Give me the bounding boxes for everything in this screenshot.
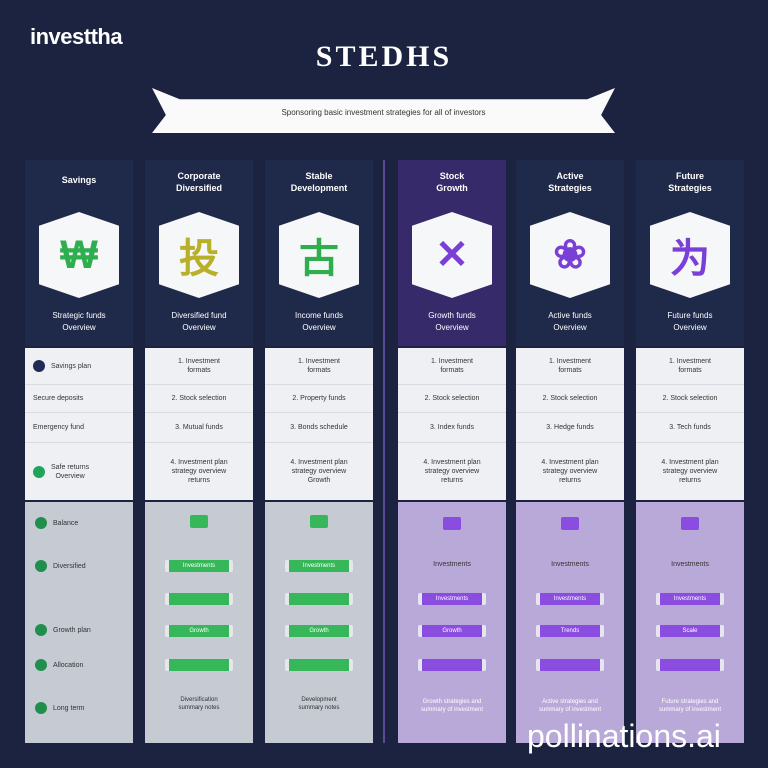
icon: hexagon 4: ✕ (435, 233, 469, 277)
column 6: 2. Stock selection (663, 395, 717, 402)
column 6: 1. Investment (669, 358, 711, 365)
column 2 (145, 160, 253, 743)
icon: hexagon 6 (650, 212, 730, 298)
column 3: 4. Investment plan (290, 459, 348, 466)
column 4: formats (440, 367, 464, 374)
column 4: Growth strategies and (423, 699, 481, 705)
icon: hexagon 4 (412, 212, 492, 298)
column 5 (516, 160, 624, 743)
banner ribbon (152, 88, 615, 133)
column 4: Growth (442, 628, 462, 634)
column 2: Investments (183, 563, 215, 569)
column 2: Diversification (180, 697, 218, 703)
column 6: Strategies (668, 183, 712, 193)
column 3: Development (301, 697, 337, 703)
column 2: Diversified (176, 183, 222, 193)
column 2: summary notes (178, 705, 220, 711)
column 4: strategy overview (425, 468, 479, 475)
column 3: Growth (308, 477, 330, 484)
column 1: Emergency fund (33, 424, 84, 431)
column 2: 4. Investment plan (170, 459, 228, 466)
column 4: returns (441, 477, 463, 484)
column 4: 1. Investment (431, 358, 473, 365)
column 3: 2. Property funds (292, 395, 346, 402)
column 4: Overview (435, 323, 469, 332)
column 4: Growth funds (428, 311, 476, 320)
column 1: Safe returns (51, 464, 89, 470)
icon: hexagon 3: 古 (299, 237, 339, 281)
column 5: Active funds (548, 311, 592, 320)
column 6: 4. Investment plan (661, 459, 719, 466)
column 5: Strategies (548, 183, 592, 193)
column 1: Overview (55, 472, 85, 480)
column 4: Investments (433, 561, 471, 568)
watermark: pollinations.ai (527, 718, 721, 754)
column 6 (636, 160, 744, 743)
column 6: Overview (673, 323, 707, 332)
icon: hexagon 5: ❀ (553, 233, 587, 277)
column 5: formats (558, 367, 582, 374)
column 4: 3. Index funds (430, 424, 474, 431)
column 4: 4. Investment plan (423, 459, 481, 466)
column 1: Long term (53, 705, 85, 712)
column 4: Stock (440, 171, 464, 181)
column 6: Future strategies and (662, 699, 718, 705)
column 6: returns (679, 477, 701, 484)
column 2: Diversified fund (171, 311, 227, 320)
column 2: 2. Stock selection (172, 395, 226, 402)
column 6: Future funds (668, 311, 712, 320)
column 5: 3. Hedge funds (546, 424, 594, 431)
icon: hexagon 2: 投 (179, 237, 219, 281)
icon: hexagon 5 (530, 212, 610, 298)
column 1: Secure deposits (33, 395, 83, 402)
column 1: Overview (62, 323, 96, 332)
column 5: Investments (551, 561, 589, 568)
column 4: 2. Stock selection (425, 395, 479, 402)
column 2: Corporate (177, 171, 220, 181)
column 3: Growth (309, 628, 329, 634)
column 6: Scale (682, 628, 698, 634)
column 5: returns (559, 477, 581, 484)
column 6: Investments (671, 561, 709, 568)
column 4: summary of investment (421, 707, 483, 713)
column 3: Stable (305, 171, 332, 181)
column 1: Diversified (53, 563, 86, 570)
column 5: strategy overview (543, 468, 597, 475)
column 6: formats (678, 367, 702, 374)
icon: hexagon 1: ₩ (60, 232, 98, 276)
column 3: 3. Bonds schedule (290, 424, 348, 431)
column 4 (398, 160, 506, 743)
column 2: strategy overview (172, 468, 226, 475)
column 2: returns (188, 477, 210, 484)
column 5: Overview (553, 323, 587, 332)
column 3: formats (307, 367, 331, 374)
column 2: formats (187, 367, 211, 374)
vertical divider (383, 160, 385, 743)
column 3: strategy overview (292, 468, 346, 475)
column 1: Growth plan (53, 627, 91, 634)
column 3: Income funds (295, 311, 343, 320)
column 2: Growth (189, 628, 209, 634)
title: STEDHS (316, 40, 452, 73)
column 3: Overview (302, 323, 336, 332)
column 3 (265, 160, 373, 743)
icon: hexagon 3 (279, 212, 359, 298)
column 5: Active (556, 171, 584, 181)
icon: hexagon 1 (39, 212, 119, 298)
banner text: Sponsoring basic investment strategies for all of investors (281, 108, 486, 117)
column 1 (25, 160, 133, 743)
column 2: 1. Investment (178, 358, 220, 365)
column 1: Savings (62, 175, 96, 185)
column 4: Growth (436, 183, 468, 193)
column 6: Investments (674, 596, 706, 602)
column 1: Balance (53, 520, 78, 527)
column 6: Future (676, 171, 704, 181)
column 5: Investments (554, 596, 586, 602)
column 4: Investments (436, 596, 468, 602)
column 5: 2. Stock selection (543, 395, 597, 402)
column 5: 4. Investment plan (541, 459, 599, 466)
icon: hexagon 2 (159, 212, 239, 298)
column 1: Allocation (53, 662, 83, 669)
column 2: 3. Mutual funds (175, 424, 223, 431)
column 3: 1. Investment (298, 358, 340, 365)
column 5: Trends (561, 628, 579, 634)
column 3: Development (291, 183, 347, 193)
column 1: Strategic funds (52, 311, 106, 320)
logo: investtha (30, 24, 122, 49)
column 6: 3. Tech funds (669, 424, 711, 431)
column 6: strategy overview (663, 468, 717, 475)
icon: hexagon 6: 为 (670, 237, 710, 281)
column 5: summary of investment (539, 707, 601, 713)
column 3: summary notes (298, 705, 340, 711)
column 6: summary of investment (659, 707, 721, 713)
column 3: Investments (303, 563, 335, 569)
column 5: Active strategies and (542, 699, 598, 705)
column 5: 1. Investment (549, 358, 591, 365)
column 2: Overview (182, 323, 216, 332)
column 1: Savings plan (51, 362, 91, 370)
